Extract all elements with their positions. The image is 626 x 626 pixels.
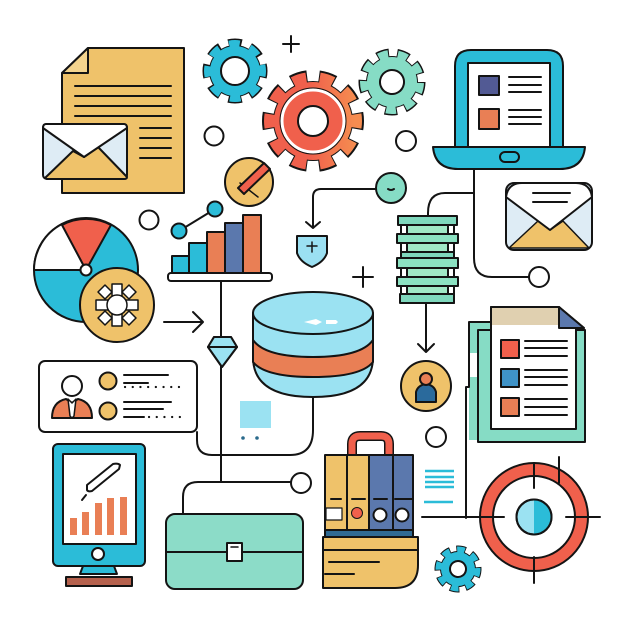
- profile card: [39, 361, 197, 432]
- user circle: [401, 361, 451, 411]
- laptop: [433, 50, 585, 169]
- diamond: [208, 337, 237, 367]
- cyan text lines: [424, 471, 454, 502]
- document with envelope: [43, 48, 184, 193]
- yellow circle with white cog: [80, 268, 154, 342]
- gear: red large: [269, 77, 357, 165]
- binders: [323, 436, 418, 588]
- clipboard document: [466, 307, 585, 518]
- plus marks and small circles: [140, 36, 446, 447]
- briefcase: [166, 514, 303, 589]
- envelope right: [506, 183, 592, 250]
- connector to large circle: [529, 267, 549, 287]
- arrow to user: [418, 303, 434, 352]
- pie chart: [34, 218, 138, 322]
- small circle with pencil: [225, 158, 273, 206]
- gear: small blue: [435, 546, 481, 592]
- gear: blue: [207, 43, 263, 99]
- node circle: [291, 473, 311, 493]
- bar chart: [168, 202, 272, 281]
- arrow right: [164, 312, 203, 332]
- server stack: [397, 216, 458, 303]
- connector lines: [183, 169, 529, 513]
- tablet monitor: [53, 444, 145, 586]
- target: [422, 457, 600, 583]
- gear: teal: [358, 48, 426, 116]
- light blue square and dots: [240, 401, 271, 440]
- teal node and arrow to shield: [306, 173, 406, 228]
- database: [253, 292, 373, 397]
- shield: [297, 236, 327, 267]
